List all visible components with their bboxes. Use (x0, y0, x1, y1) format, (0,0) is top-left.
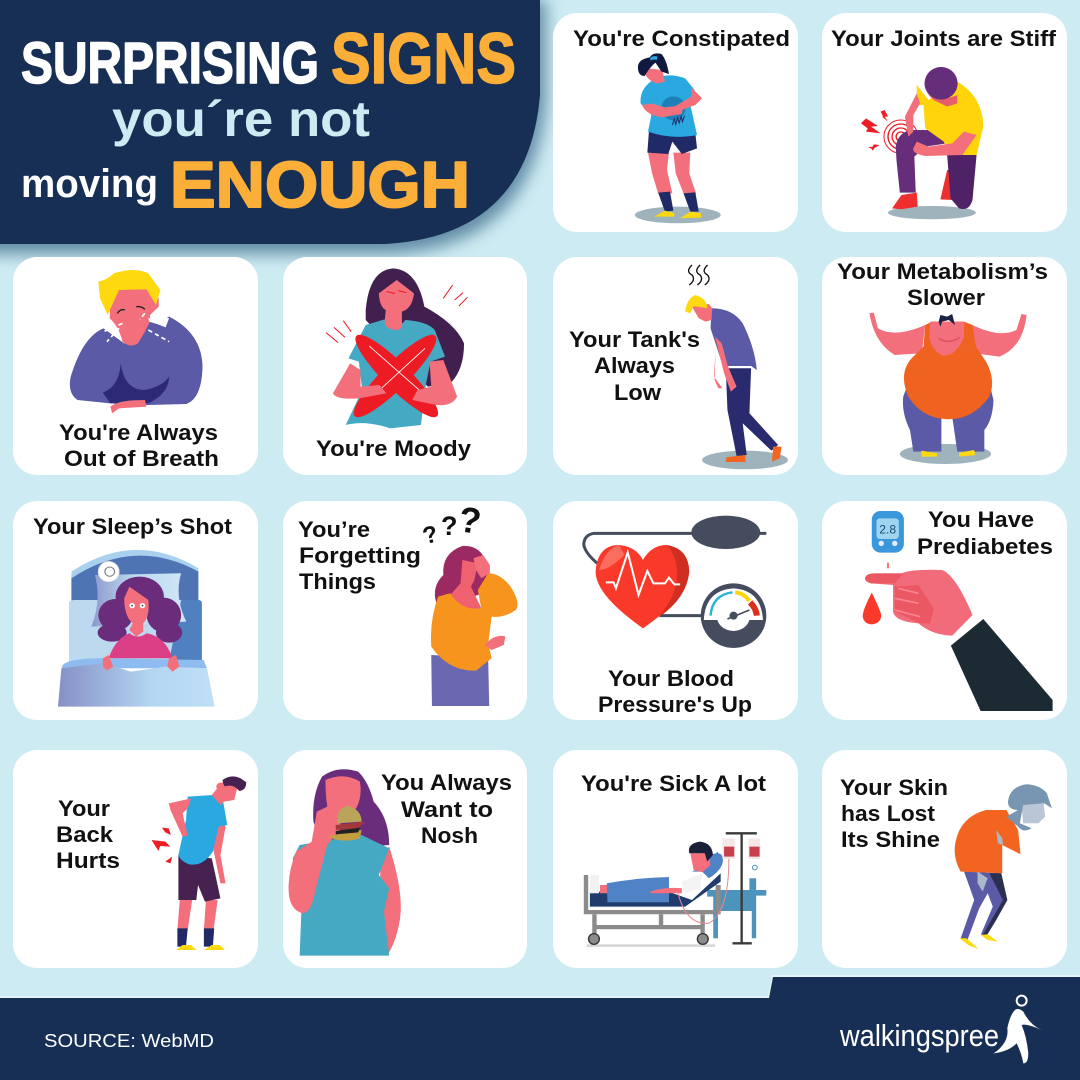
title: ENOUGH (170, 148, 470, 221)
icon: confused woman (431, 546, 518, 706)
icon: woman awake in bed (58, 550, 215, 707)
panel: Your Tank's Always Low (553, 257, 798, 475)
label: Slower (907, 285, 985, 310)
icon: question marks: ? (420, 520, 441, 550)
panel: Your Blood Pressure's Up (553, 501, 798, 720)
icon: man kneeling holding knee (861, 67, 983, 219)
icon: question marks: ? (456, 498, 484, 542)
label: has Lost (841, 801, 936, 826)
label: Always (594, 353, 675, 378)
icon: question marks (420, 498, 484, 550)
icon: overweight man (869, 313, 1027, 464)
panel: You Have Prediabetes (822, 501, 1067, 720)
label: Its Shine (841, 827, 940, 852)
icon: heart with blood pressure cuff (584, 516, 766, 648)
panel: Your Joints are Stiff (822, 13, 1067, 232)
label: Low (614, 380, 662, 405)
label: Hurts (56, 848, 120, 873)
panel: You're Forgetting Things (283, 498, 527, 720)
panel: You're Always Out of Breath (13, 257, 258, 475)
logo: walkingspree (839, 996, 1042, 1063)
label: Prediabetes (917, 534, 1053, 559)
title: SIGNS (331, 20, 516, 99)
label (598, 666, 752, 717)
icon: pale hunched person (955, 784, 1052, 949)
label: Nosh (421, 823, 478, 848)
label: You Have (928, 507, 1034, 532)
icon: pricked finger with glucose meter (863, 511, 1053, 711)
panel: Your Sleep's Shot (13, 501, 258, 720)
logo: walkingspree: walkingspree (839, 1018, 999, 1053)
panel: Your Skin has Lost Its Shine (822, 750, 1067, 968)
label: You Always (381, 770, 512, 795)
label (56, 796, 120, 873)
label: Your Blood (608, 666, 734, 691)
label (569, 327, 700, 405)
source text: SOURCE: WebMD (44, 1031, 214, 1051)
label: Forgetting (299, 543, 421, 568)
title (21, 20, 516, 221)
label (59, 420, 219, 471)
icon: woman eating burger (289, 769, 401, 956)
icon: patient in hospital bed with IV (584, 833, 766, 947)
label (298, 517, 421, 594)
icon: man with back pain (152, 776, 246, 950)
label: Things (299, 569, 376, 594)
icon: coughing man (70, 270, 203, 413)
label: Your Metabolism’s (837, 259, 1048, 284)
label: Your (58, 796, 110, 821)
label (837, 259, 1048, 310)
panel: You Always Want to Nosh (283, 750, 527, 968)
panel: You're Sick A lot (553, 750, 798, 968)
label: Your Sleep’s Shot (33, 514, 233, 539)
label: You're Moody (316, 436, 472, 461)
label: Your Tank's (569, 327, 700, 352)
label (917, 507, 1053, 559)
label (840, 775, 948, 852)
label (381, 770, 512, 848)
icon: angry woman with red X (326, 268, 467, 428)
icon: woman holding stomach (635, 53, 721, 223)
icon: question marks: ? (441, 511, 458, 541)
panel: Your Metabolism's Slower (822, 257, 1067, 475)
icon: tired man walking (685, 265, 788, 469)
label: You're Sick A lot (581, 771, 767, 796)
panel: You're Constipated (553, 13, 798, 232)
label: You're Constipated (573, 26, 790, 51)
label: Back (56, 822, 114, 847)
icon: pricked finger with glucose meter: 2.8 (879, 523, 896, 537)
label: Out of Breath (64, 446, 219, 471)
label: You're Always (59, 420, 218, 445)
title: SURPRISING (21, 31, 319, 96)
label: Your Skin (840, 775, 948, 800)
panel: Your Back Hurts (13, 750, 258, 968)
title: moving (21, 162, 158, 206)
label: Pressure's Up (598, 692, 752, 717)
title: you´re not (112, 91, 370, 147)
panel: You're Moody (283, 257, 527, 475)
panel: footer (0, 975, 1080, 1080)
label: You’re (298, 517, 370, 542)
label: Your Joints are Stiff (831, 26, 1057, 51)
label: Want to (401, 797, 493, 822)
panel: header banner (0, 0, 546, 254)
